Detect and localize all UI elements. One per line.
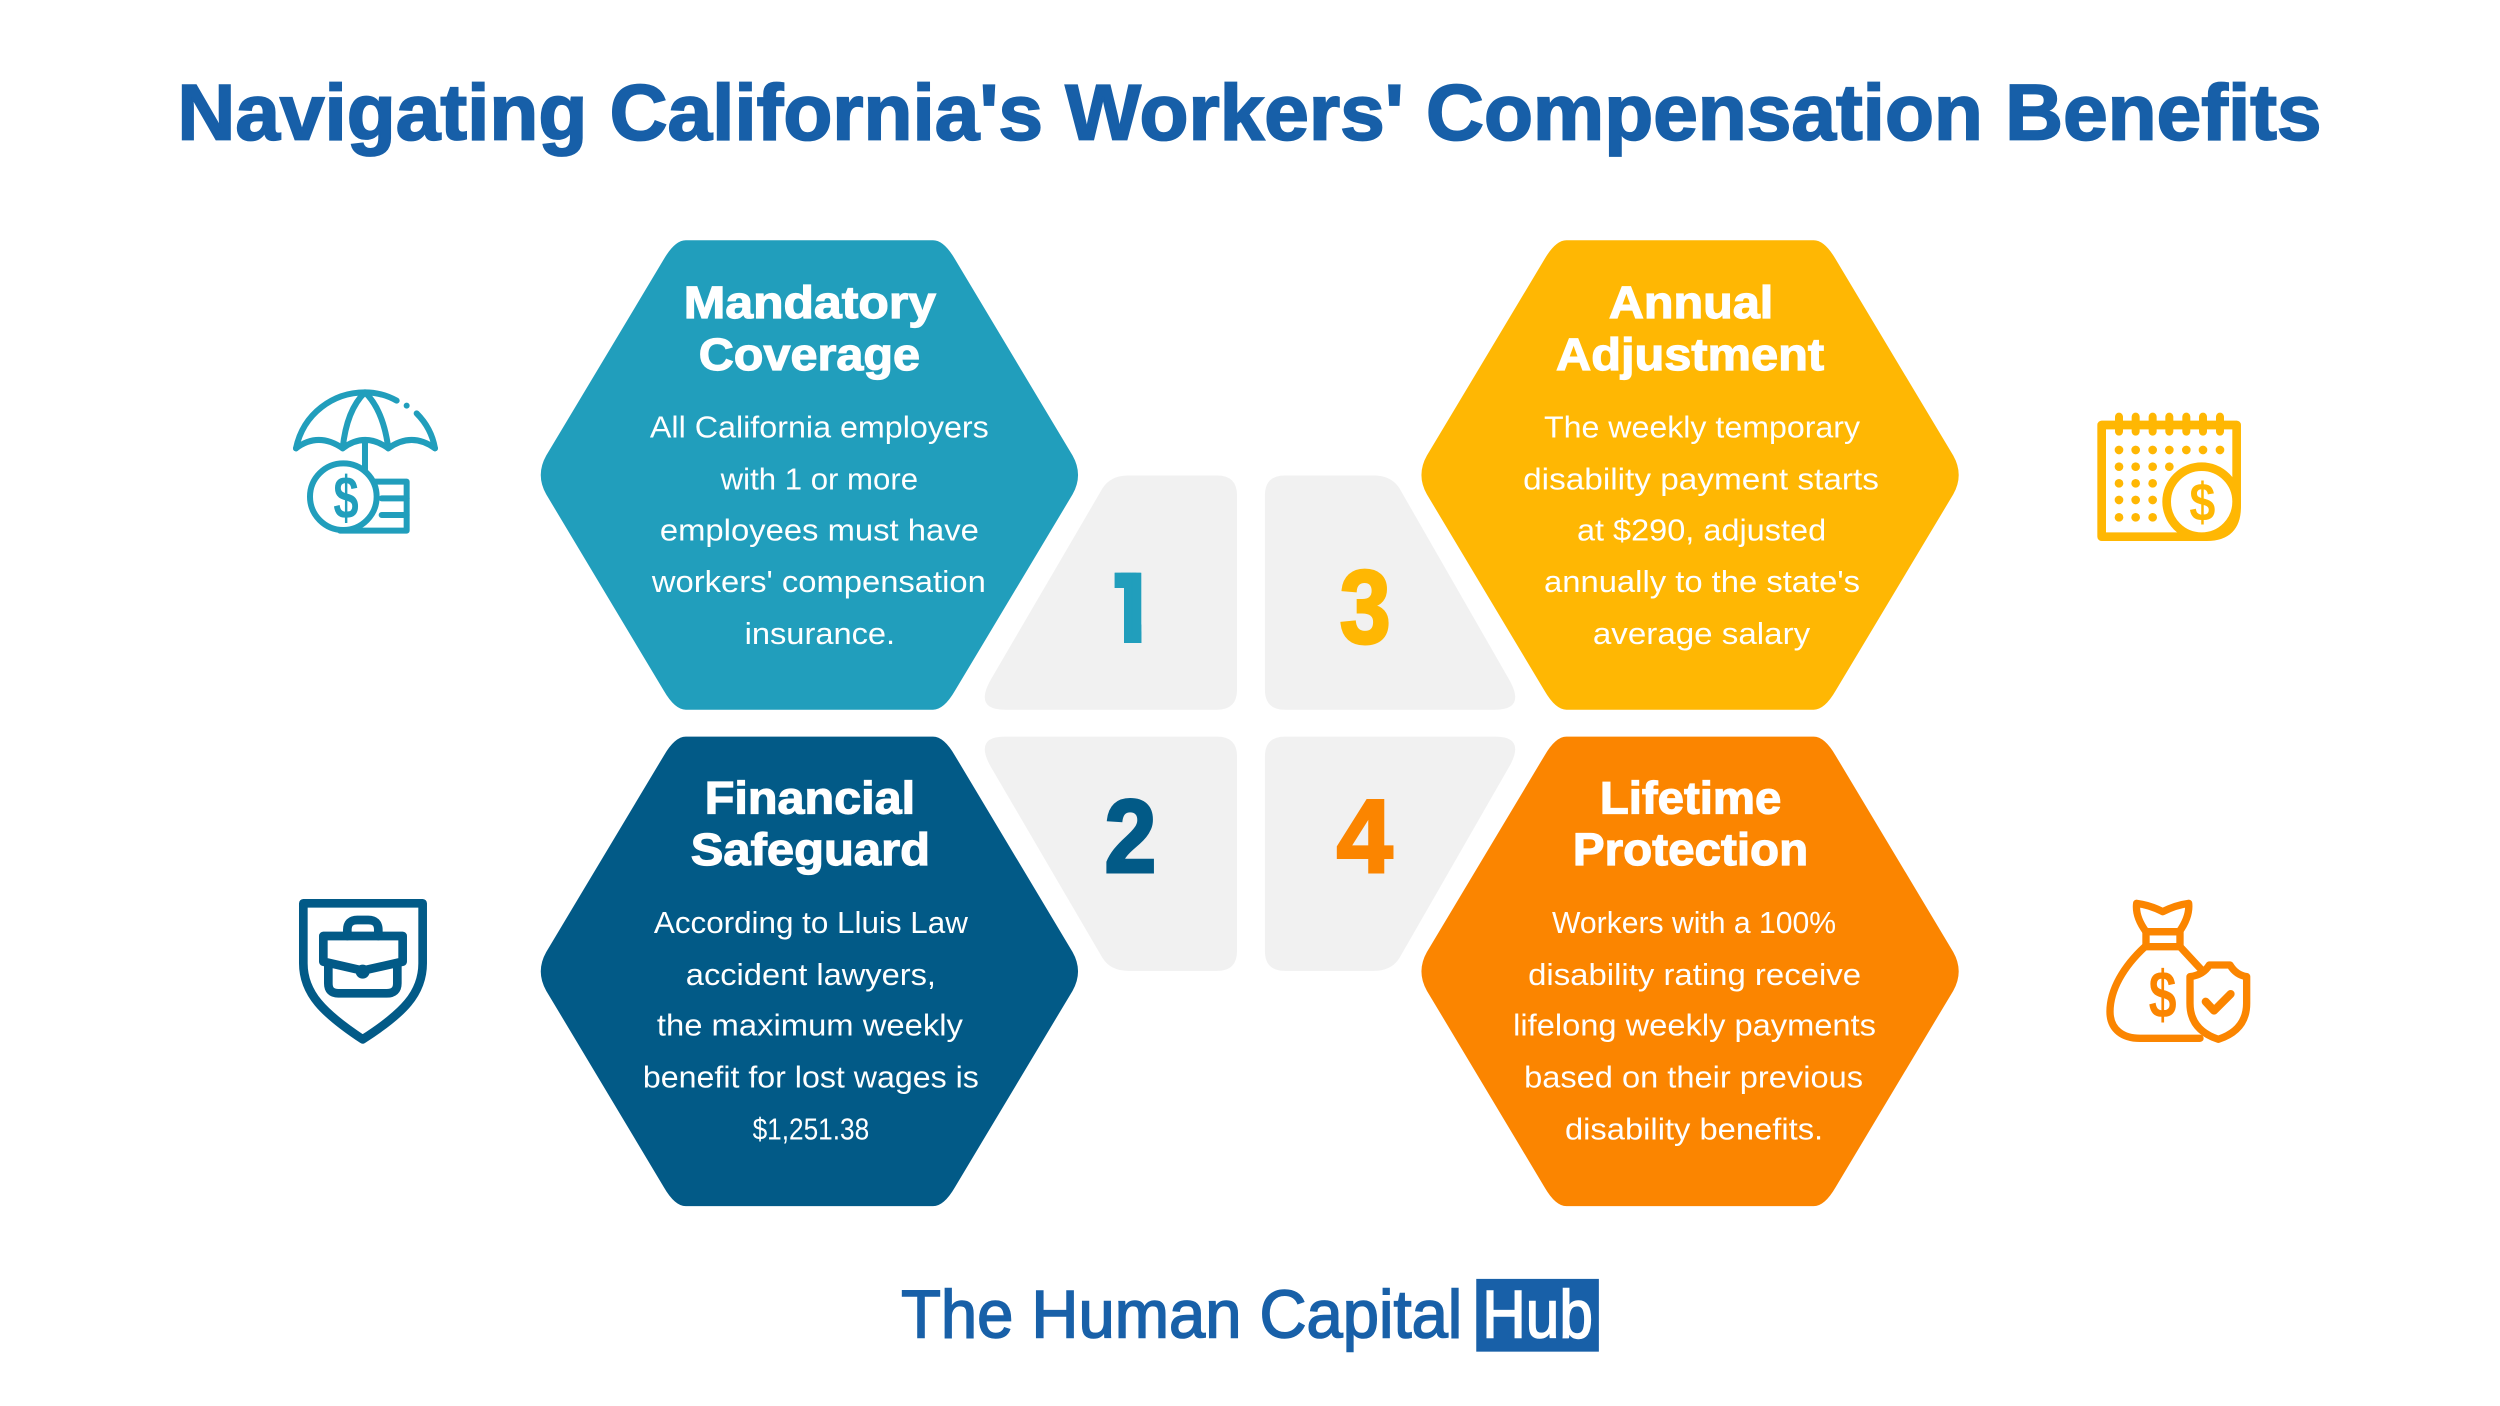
body text: annual adjustment [1523,410,1879,651]
body text: financial safeguard: benefit for lost wages is [643,1060,979,1095]
body text: lifetime protection [1513,905,1876,1146]
logo: The Human Capital Hub: The Human Capital [901,1278,1462,1353]
body text: annual adjustment: disability payment starts [1523,461,1879,496]
heading: mandatory coverage: Coverage [699,328,920,380]
number 1 [1114,572,1142,643]
heading: financial safeguard [691,771,930,875]
hexagon: lifetime protection [1421,737,1959,1206]
icon: money bag with shield: $ [2149,959,2177,1033]
panel: lifetime protection [1421,737,1959,1206]
heading: lifetime protection: Lifetime [1600,771,1781,823]
body text: annual adjustment: at $290, adjusted [1577,512,1826,547]
number 1: 1 [1111,542,1149,667]
heading: financial safeguard: Safeguard [691,823,930,875]
body text: lifetime protection: Workers with a 100% [1552,905,1836,940]
body text: financial safeguard: accident lawyers, [686,957,936,992]
title: Navigating California's Workers' Compensation Benefits [177,69,2322,157]
body text: lifetime protection: based on their previous [1524,1060,1863,1095]
tile 2 with number: 2 [1104,778,1156,894]
body text: mandatory coverage: with 1 or more [720,461,918,496]
body text: mandatory coverage [650,410,989,651]
tile 2 with number [985,737,1237,971]
hexagon: annual adjustment [1421,240,1959,710]
panel: annual adjustment [1421,240,1959,710]
body text: lifetime protection: disability benefits. [1565,1111,1823,1146]
body text: mandatory coverage: workers' compensation [651,564,986,599]
heading: financial safeguard: Financial [705,771,915,823]
tile 4 with number: 4 [1337,778,1393,894]
logo: The Human Capital Hub: Hub [1482,1278,1593,1353]
heading: annual adjustment: Annual [1609,276,1773,328]
body text: annual adjustment: average salary [1593,616,1811,651]
icon: umbrella and coins [296,392,435,531]
body text: mandatory coverage: insurance. [745,616,895,651]
body text: mandatory coverage: All California employers [650,410,989,445]
infographic content [177,69,2322,1353]
icon: umbrella and coins: $ [333,464,359,531]
heading: annual adjustment [1556,276,1824,380]
icon: calendar with dollar: $ [2189,473,2215,533]
body text: lifetime protection: disability rating receive [1528,957,1861,992]
icon: shield with briefcase [303,903,423,1039]
heading: lifetime protection: Protection [1573,823,1808,875]
hexagon: financial safeguard [541,737,1078,1206]
body text: annual adjustment: annually to the state's [1544,564,1860,599]
icon: money bag with shield [2110,903,2247,1039]
heading: mandatory coverage: Mandatory [684,276,937,328]
heading: lifetime protection [1573,771,1808,875]
panel: mandatory coverage [541,240,1078,710]
body text: financial safeguard: $1,251.38 [753,1111,869,1146]
heading: annual adjustment: Adjustment [1556,328,1824,380]
tile 3 with number [1265,475,1515,710]
body text: mandatory coverage: employees must have [660,512,979,547]
body text: financial safeguard: the maximum weekly [657,1008,963,1043]
body text: annual adjustment: The weekly temporary [1544,410,1861,445]
tile background 1 [985,475,1237,710]
heading: mandatory coverage [684,276,937,380]
tile 4 with number [1265,737,1515,971]
body text: financial safeguard [643,905,979,1146]
icon: calendar with dollar [2102,417,2237,537]
body text: financial safeguard: According to Lluis Law [654,905,969,940]
panel: financial safeguard [541,737,1078,1206]
tile 3 with number: 3 [1340,549,1391,665]
body text: lifetime protection: lifelong weekly payments [1513,1008,1876,1043]
hexagon: mandatory coverage [541,240,1078,710]
